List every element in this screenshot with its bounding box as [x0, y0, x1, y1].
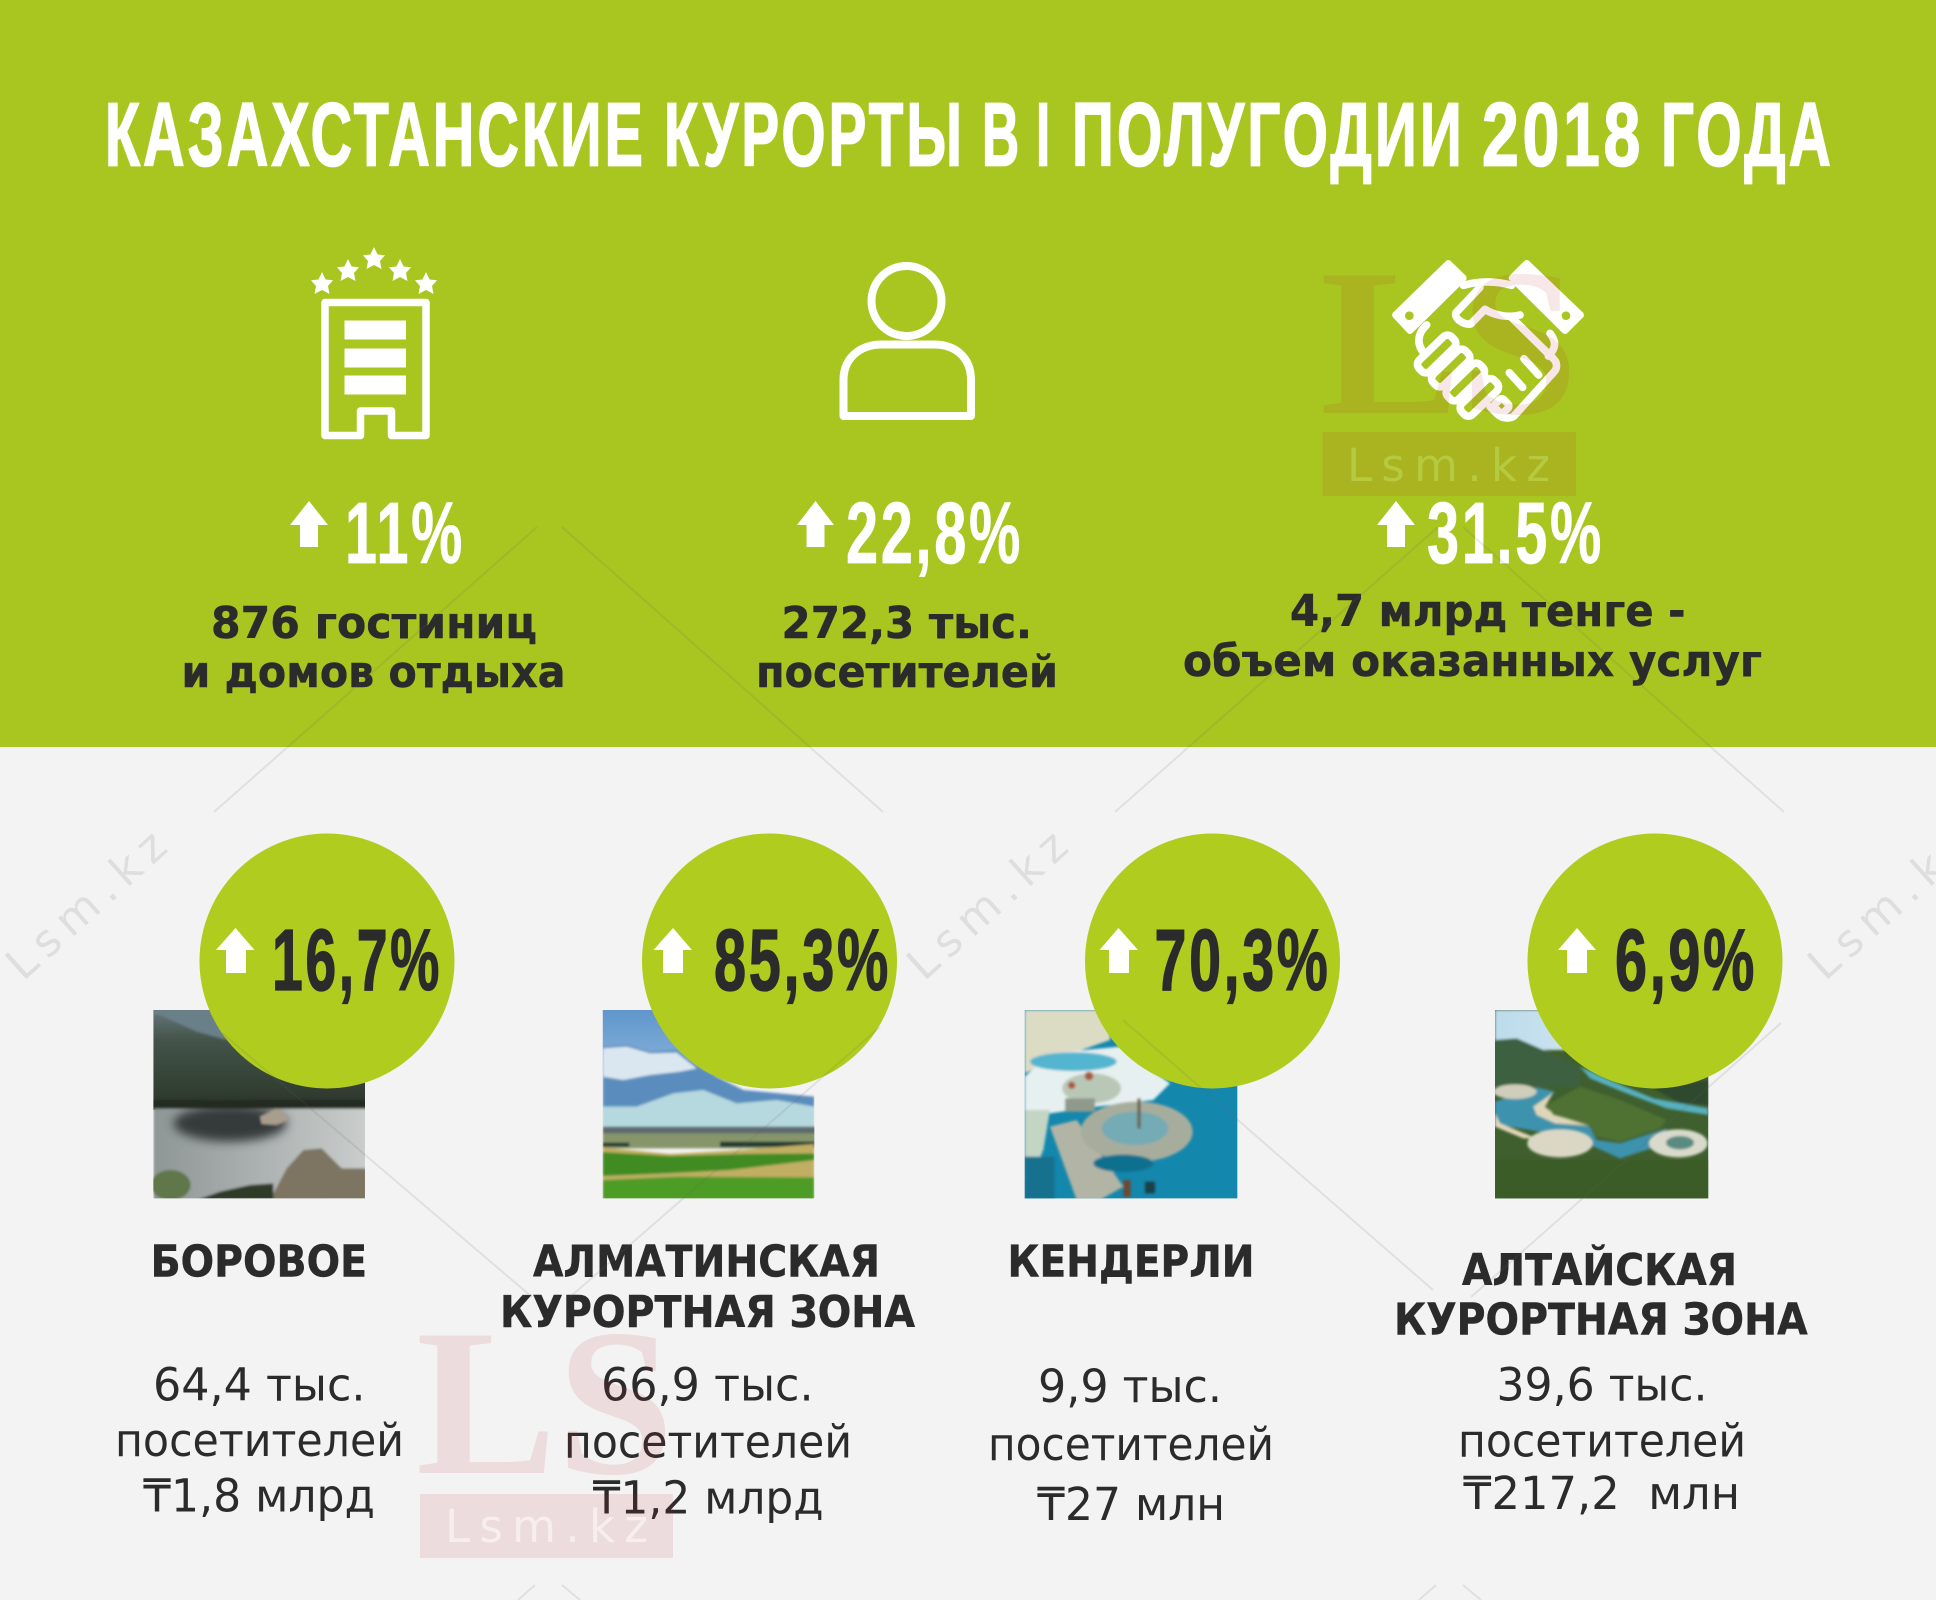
photo: Altai lagoon resort	[1493, 1010, 1708, 1200]
caption: services: объем оказанных услуг	[1183, 636, 1762, 687]
title: В	[982, 86, 1022, 186]
watermark: repeating Lsm.kz marks: Lsm.kz	[897, 820, 1078, 990]
title: ПОЛУГОДИИ	[1072, 86, 1465, 186]
resort figures	[115, 1359, 404, 1522]
watermark: LS logo bottom: Lsm.kz	[445, 1500, 648, 1553]
caption: services	[1183, 586, 1762, 687]
arrow up	[797, 501, 834, 547]
resort figures: посетителей	[988, 1418, 1274, 1471]
resort figures	[988, 1360, 1274, 1531]
resort figures: 39,6 тыс.	[1496, 1359, 1708, 1412]
title	[105, 86, 1834, 186]
caption: visitors: посетителей	[756, 647, 1058, 698]
stat: services	[1183, 263, 1762, 687]
watermark: LS logo top: Lsm.kz	[1347, 439, 1550, 492]
badge circle	[1528, 834, 1782, 1088]
icon: handshake	[1395, 263, 1581, 419]
photo: lake Borovoe	[151, 1010, 367, 1202]
value 16,7%: 16,7%	[272, 912, 442, 1009]
value 85,3%: 85,3%	[714, 912, 891, 1009]
caption: hotels: и домов отдыха	[182, 647, 566, 698]
icon: hotel with five stars	[311, 247, 437, 436]
resort name: КУРОРТНАЯ ЗОНА	[500, 1287, 915, 1338]
resort figures: ₸1,8 млрд	[143, 1470, 375, 1522]
resort 3: Kenderli	[988, 834, 1340, 1531]
arrow up	[1377, 501, 1415, 547]
photo: water park pools	[1025, 1010, 1238, 1200]
badge circle	[1085, 834, 1340, 1088]
green header panel	[0, 0, 1936, 747]
resort figures	[1458, 1359, 1746, 1520]
resort name	[1394, 1243, 1808, 1346]
badge circle	[642, 834, 897, 1088]
value 31.5%: 31.5%	[1427, 485, 1604, 582]
photo: mountains and fields	[603, 1010, 816, 1200]
arrow up	[1558, 928, 1596, 973]
caption: services: 4,7 млрд тенге -	[1290, 586, 1686, 637]
arrow up	[654, 928, 692, 973]
watermark: LS logo top: LS	[1320, 227, 1578, 459]
resort 4: Altai zone	[1394, 834, 1808, 1520]
title: ГОДА	[1661, 86, 1834, 186]
caption: visitors: 272,3 тыс.	[782, 598, 1032, 649]
resort 1: Borovoe	[115, 834, 454, 1522]
resort figures: посетителей	[115, 1414, 404, 1467]
resort name: БОРОВОЕ	[151, 1236, 367, 1288]
title: КАЗАХСТАНСКИЕ	[105, 86, 646, 186]
resort name	[500, 1236, 915, 1338]
resort figures: 9,9 тыс.	[1038, 1360, 1222, 1413]
resort figures: ₸217,2 млн	[1463, 1467, 1740, 1520]
resort figures: 66,9 тыс.	[601, 1359, 814, 1412]
resort name: КЕНДЕРЛИ	[1008, 1236, 1254, 1288]
value 11%: 11%	[345, 485, 465, 582]
title: I	[1036, 86, 1053, 186]
resort figures	[564, 1359, 852, 1524]
stat: hotels	[182, 247, 566, 698]
stat: visitors	[756, 266, 1058, 698]
arrow up	[290, 501, 328, 547]
resort name: КУРОРТНАЯ ЗОНА	[1394, 1294, 1808, 1346]
value 6,9%: 6,9%	[1615, 912, 1757, 1009]
icon: person	[844, 266, 971, 416]
watermark: repeating Lsm.kz marks: Lsm.kz	[0, 820, 177, 990]
resort figures: 64,4 тыс.	[153, 1359, 366, 1412]
caption: hotels	[182, 598, 566, 698]
value 70,3%: 70,3%	[1154, 912, 1330, 1009]
watermark: repeating Lsm.kz marks	[0, 527, 1936, 1600]
resort figures: ₸1,2 млрд	[593, 1472, 824, 1524]
value 22,8%: 22,8%	[846, 485, 1023, 582]
caption: hotels: 876 гостиниц	[211, 598, 537, 649]
resort name: АЛМАТИНСКАЯ	[533, 1236, 880, 1288]
title: КУРОРТЫ	[664, 86, 965, 186]
caption: visitors	[756, 598, 1058, 698]
resort figures: посетителей	[1458, 1414, 1746, 1468]
title: 2018	[1482, 86, 1644, 186]
resort figures: ₸27 млн	[1037, 1478, 1225, 1531]
resort name: АЛТАЙСКАЯ	[1462, 1243, 1737, 1296]
badge circle	[200, 834, 454, 1088]
watermark: LS logo bottom: LS	[416, 1287, 674, 1519]
arrow up	[216, 928, 254, 973]
arrow up	[1100, 928, 1138, 973]
resort 2: Almaty zone	[500, 834, 915, 1524]
resort figures: посетителей	[564, 1416, 852, 1468]
